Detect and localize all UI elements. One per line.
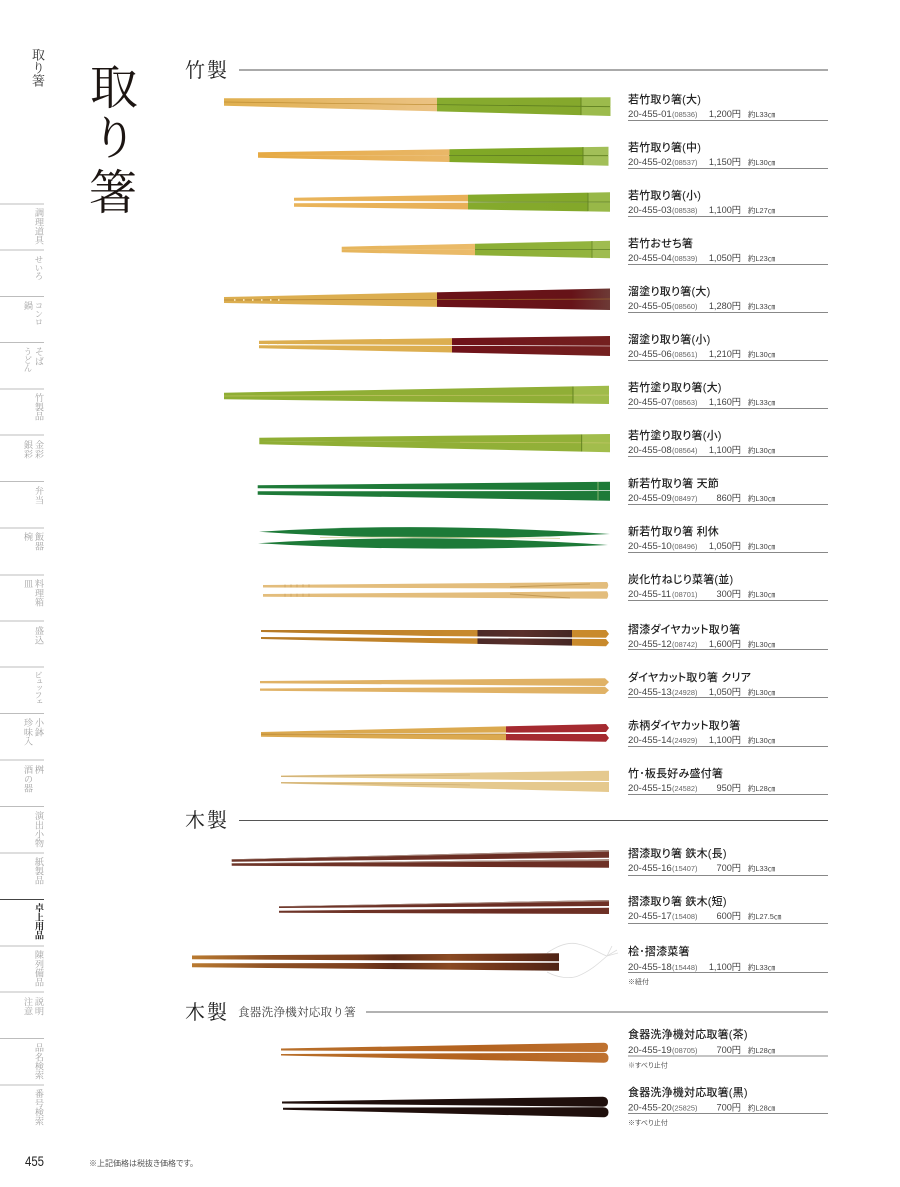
- page title: [89, 62, 138, 220]
- product 9 info: 約L30㎝: [748, 494, 776, 503]
- chopsticks 8: [259, 434, 610, 452]
- chopsticks 9: [258, 482, 610, 501]
- product 2 info: 1,150円: [709, 157, 741, 167]
- product 20 info: 700円: [716, 1102, 741, 1112]
- side index navigation: 桝: [34, 764, 44, 775]
- product 12 info: 約L30㎝: [748, 640, 776, 649]
- product 9 info: 新若竹取り箸 天節: [628, 476, 719, 490]
- product 8 info: [628, 428, 828, 456]
- product 5 info: 溜塗り取り箸(大): [628, 284, 710, 298]
- product 2 info: 20-455-02: [628, 157, 672, 168]
- page title: 箸: [89, 167, 137, 220]
- product 19: [281, 1027, 828, 1070]
- side index navigation: 銀彩: [22, 440, 33, 459]
- product 3 info: (08538): [672, 206, 697, 215]
- chopsticks 20: [282, 1097, 608, 1117]
- product 9: [258, 476, 828, 504]
- product 19 info: [628, 1027, 828, 1070]
- product 13 info: (24928): [672, 688, 697, 697]
- product 11 info: 炭化竹ねじり菜箸(並): [628, 572, 733, 586]
- product 18 info: 20-455-18: [628, 962, 672, 973]
- product 14: [261, 718, 828, 746]
- product 10 info: 1,050円: [709, 541, 741, 551]
- product 16: [232, 846, 828, 876]
- product 13 info: 1,050円: [709, 687, 741, 697]
- product 6 info: 溜塗り取り箸(小): [628, 332, 710, 346]
- chopsticks 11: [263, 582, 608, 599]
- side index navigation: 料理箱: [34, 578, 44, 607]
- product 19 info: 約L28㎝: [748, 1046, 776, 1055]
- chopsticks 16: [232, 850, 609, 868]
- product 9 info: 20-455-09: [628, 493, 672, 504]
- side index navigation: 皿: [22, 579, 33, 588]
- product 9 info: [628, 476, 828, 504]
- product 15 info: 竹･板長好み盛付箸: [628, 766, 723, 780]
- product 17: [279, 894, 828, 924]
- product 12 info: (08742): [672, 640, 697, 649]
- heading: wood dishwasher safe: [185, 1001, 828, 1024]
- side index navigation: 説明: [34, 996, 44, 1016]
- side index navigation: せいろ: [34, 255, 43, 281]
- product 15 info: [628, 766, 828, 794]
- product 16 info: 約L33㎝: [748, 864, 776, 873]
- product 5 info: 20-455-05: [628, 301, 672, 312]
- product 10 info: [628, 524, 828, 552]
- product 16 info: (15407): [672, 864, 697, 873]
- side index navigation: 飯器: [34, 531, 44, 551]
- chopsticks 4: [342, 241, 610, 258]
- product 18 info: [628, 944, 828, 986]
- product 17 info: 約L27.5㎝: [748, 912, 782, 921]
- product 4 info: 1,050円: [709, 253, 741, 263]
- product 20 info: (25825): [672, 1104, 697, 1112]
- product 13: [260, 670, 828, 698]
- product 3 info: 20-455-03: [628, 205, 672, 216]
- footnote: ※上記価格は税抜き価格です。: [89, 1158, 194, 1168]
- product 20 info: [628, 1085, 828, 1127]
- heading: wood: 木製: [185, 809, 229, 832]
- product 12 info: 摺漆ダイヤカット取り箸: [628, 622, 740, 636]
- side index navigation: 椀: [22, 531, 33, 542]
- product 12: [261, 622, 828, 650]
- product 15 info: (24582): [672, 784, 697, 793]
- product 16 info: 摺漆取り箸 鉄木(長): [628, 846, 727, 860]
- product 17 info: 600円: [716, 911, 741, 921]
- product 20 info: ※すべり止付: [628, 1118, 668, 1127]
- product 3 info: 若竹取り箸(小): [628, 188, 701, 202]
- product 4 info: (08539): [672, 254, 697, 263]
- product 5 info: 約L33㎝: [748, 302, 776, 311]
- product 7 info: 1,160円: [709, 397, 741, 407]
- product 3 info: 1,100円: [709, 205, 741, 215]
- chopsticks 3: [294, 192, 610, 212]
- product 19 info: 700円: [716, 1045, 741, 1055]
- product 13 info: ダイヤカット取り箸 クリア: [628, 670, 751, 684]
- chopsticks 12: [261, 630, 609, 646]
- chopsticks 18: [192, 953, 559, 971]
- side index navigation: 酒の器: [22, 765, 33, 793]
- side index navigation: うどん: [23, 347, 32, 372]
- product 1 info: 1,200円: [709, 109, 741, 119]
- product 14 info: 20-455-14: [628, 735, 672, 746]
- product 14 info: [628, 718, 828, 746]
- product 1 info: [628, 92, 828, 120]
- side index navigation: 注意: [22, 996, 33, 1016]
- product 11 info: 20-455-11: [628, 589, 671, 600]
- chopsticks 17: [279, 900, 609, 914]
- product 10 info: (08496): [672, 542, 697, 551]
- product 8: [259, 428, 828, 456]
- product 4 info: 20-455-04: [628, 253, 672, 264]
- product 10 info: 約L30㎝: [748, 542, 776, 551]
- product 7 info: 約L33㎝: [748, 398, 776, 407]
- product 5 info: [628, 284, 828, 312]
- product 14 info: (24929): [672, 736, 697, 745]
- product 7 info: [628, 380, 828, 408]
- product 2 info: (08537): [672, 158, 697, 167]
- product 8 info: 1,100円: [709, 445, 741, 455]
- product 12 info: [628, 622, 828, 650]
- product 6 info: 1,210円: [709, 349, 741, 359]
- product 2 info: 若竹取り箸(中): [628, 140, 701, 154]
- side index navigation: 盛込: [34, 625, 44, 645]
- chopsticks 5: [224, 288, 610, 310]
- product 3: [294, 188, 828, 216]
- product 6 info: (08561): [672, 350, 697, 359]
- product 18 info: ※紐付: [628, 977, 649, 986]
- chopsticks 15: [281, 771, 609, 792]
- product 12 info: 20-455-12: [628, 639, 672, 650]
- product 15 info: 950円: [716, 783, 741, 793]
- product 15 info: 約L28㎝: [748, 784, 776, 793]
- side index navigation: 金彩: [34, 439, 44, 459]
- product 11 info: [628, 572, 828, 600]
- chopsticks 7: [224, 386, 609, 404]
- product 18 info: 約L33㎝: [748, 963, 776, 972]
- product 7 info: (08563): [672, 398, 697, 407]
- product 20: [282, 1085, 828, 1127]
- product 18 info: 1,100円: [709, 962, 741, 972]
- product 3 info: [628, 188, 828, 216]
- product 7 info: 若竹塗り取り箸(大): [628, 380, 722, 394]
- product 19 info: 20-455-19: [628, 1045, 672, 1056]
- product 7: [224, 380, 828, 408]
- side index navigation: 紙製品: [34, 857, 44, 885]
- heading: bamboo: 竹製: [185, 59, 229, 82]
- product 7 info: 20-455-07: [628, 397, 672, 408]
- side index navigation: 珍味入: [22, 717, 33, 746]
- side index navigation: 竹製品: [34, 392, 44, 421]
- product 11: [263, 572, 828, 600]
- product 9 info: (08497): [672, 494, 697, 503]
- side index navigation: そば: [34, 347, 44, 365]
- side index navigation: ビュッフェ: [34, 671, 43, 704]
- side index navigation: 小鉢: [34, 717, 44, 737]
- product 1 info: 約L33㎝: [748, 110, 776, 119]
- product 15: [281, 766, 828, 794]
- product 5 info: 1,280円: [709, 301, 741, 311]
- product 16 info: 700円: [716, 863, 741, 873]
- product 13 info: [628, 670, 828, 698]
- product 2 info: [628, 140, 828, 168]
- product 5: [224, 284, 828, 312]
- chopsticks 14: [261, 724, 609, 742]
- product 13 info: 約L30㎝: [748, 688, 776, 697]
- product 17 info: 20-455-17: [628, 911, 672, 922]
- product 1: [224, 92, 828, 120]
- product 20 info: 約L28㎝: [748, 1104, 776, 1112]
- product 10: [258, 524, 828, 552]
- product 14 info: 赤柄ダイヤカット取り箸: [628, 718, 740, 732]
- product 6 info: [628, 332, 828, 360]
- chopsticks 13: [260, 678, 609, 694]
- product 17 info: 摺漆取り箸 鉄木(短): [628, 894, 727, 908]
- product 6: [259, 332, 828, 360]
- product 2: [258, 140, 828, 168]
- product 9 info: 860円: [716, 493, 741, 503]
- product 8 info: 約L30㎝: [748, 446, 776, 455]
- side index navigation: コンロ: [34, 301, 43, 326]
- product 6 info: 20-455-06: [628, 349, 672, 360]
- product 8 info: (08564): [672, 446, 697, 455]
- side index navigation: 調理道具: [34, 208, 44, 246]
- cord: [547, 943, 618, 978]
- side index navigation: 鍋: [22, 301, 33, 311]
- heading: wood dishwasher safe: 木製: [185, 1001, 229, 1024]
- product 8 info: 若竹塗り取り箸(小): [628, 428, 722, 442]
- product 4 info: 約L23㎝: [748, 254, 776, 263]
- product 18: [192, 943, 828, 986]
- product 4: [342, 236, 828, 264]
- product 2 info: 約L30㎝: [748, 158, 776, 167]
- product 18 info: 桧･摺漆菜箸: [628, 944, 690, 958]
- product 17 info: [628, 894, 828, 924]
- product 1 info: 若竹取り箸(大): [628, 92, 701, 106]
- chopsticks 19: [281, 1043, 608, 1063]
- product 14 info: 1,100円: [709, 735, 741, 745]
- side index navigation: 品名検索: [34, 1043, 44, 1081]
- product 19 info: 食器洗浄機対応取箸(茶): [628, 1027, 748, 1041]
- side index navigation: 弁当: [34, 485, 44, 505]
- product 20 info: 20-455-20: [628, 1102, 672, 1114]
- page number: 455: [25, 1153, 44, 1169]
- chopsticks 1: [224, 97, 610, 116]
- product 10 info: 新若竹取り箸 利休: [628, 524, 719, 538]
- product 8 info: 20-455-08: [628, 445, 672, 456]
- side tab: current section: 取り箸: [30, 48, 45, 87]
- product 15 info: 20-455-15: [628, 783, 672, 794]
- product 3 info: 約L27㎝: [748, 206, 776, 215]
- product 4 info: 若竹おせち箸: [628, 236, 693, 250]
- side index navigation: [0, 204, 44, 1127]
- side index navigation: 陳列備品: [34, 949, 44, 988]
- product 6 info: 約L30㎝: [748, 350, 776, 359]
- side index navigation: 卓上用品: [34, 902, 44, 941]
- product 11 info: 300円: [716, 589, 741, 599]
- chopsticks 10: [258, 527, 610, 549]
- product 11 info: (08701): [672, 590, 697, 599]
- page title: り: [91, 113, 137, 164]
- product 4 info: [628, 236, 828, 264]
- product 18 info: (15448): [672, 963, 697, 972]
- product 14 info: 約L30㎝: [748, 736, 776, 745]
- chopsticks 2: [258, 147, 608, 166]
- product 1 info: (08536): [672, 110, 697, 119]
- product 16 info: 20-455-16: [628, 863, 672, 874]
- product 11 info: 約L30㎝: [748, 590, 776, 599]
- product 5 info: (08560): [672, 302, 697, 311]
- product 10 info: 20-455-10: [628, 541, 672, 552]
- product 13 info: 20-455-13: [628, 687, 672, 698]
- side index navigation: 演出小物: [34, 810, 44, 849]
- page title: 取: [90, 62, 138, 115]
- product 17 info: (15408): [672, 912, 697, 921]
- product 19 info: (08705): [672, 1046, 697, 1055]
- product 19 info: ※すべり止付: [628, 1060, 668, 1070]
- product 1 info: 20-455-01: [628, 109, 672, 120]
- product 16 info: [628, 846, 828, 876]
- product 20 info: 食器洗浄機対応取箸(黒): [628, 1085, 748, 1099]
- heading: wood dishwasher safe: 食器洗浄機対応取り箸: [238, 1005, 356, 1019]
- side index navigation: 番号検索: [34, 1088, 44, 1127]
- chopsticks 6: [259, 336, 610, 356]
- product 12 info: 1,600円: [709, 639, 741, 649]
